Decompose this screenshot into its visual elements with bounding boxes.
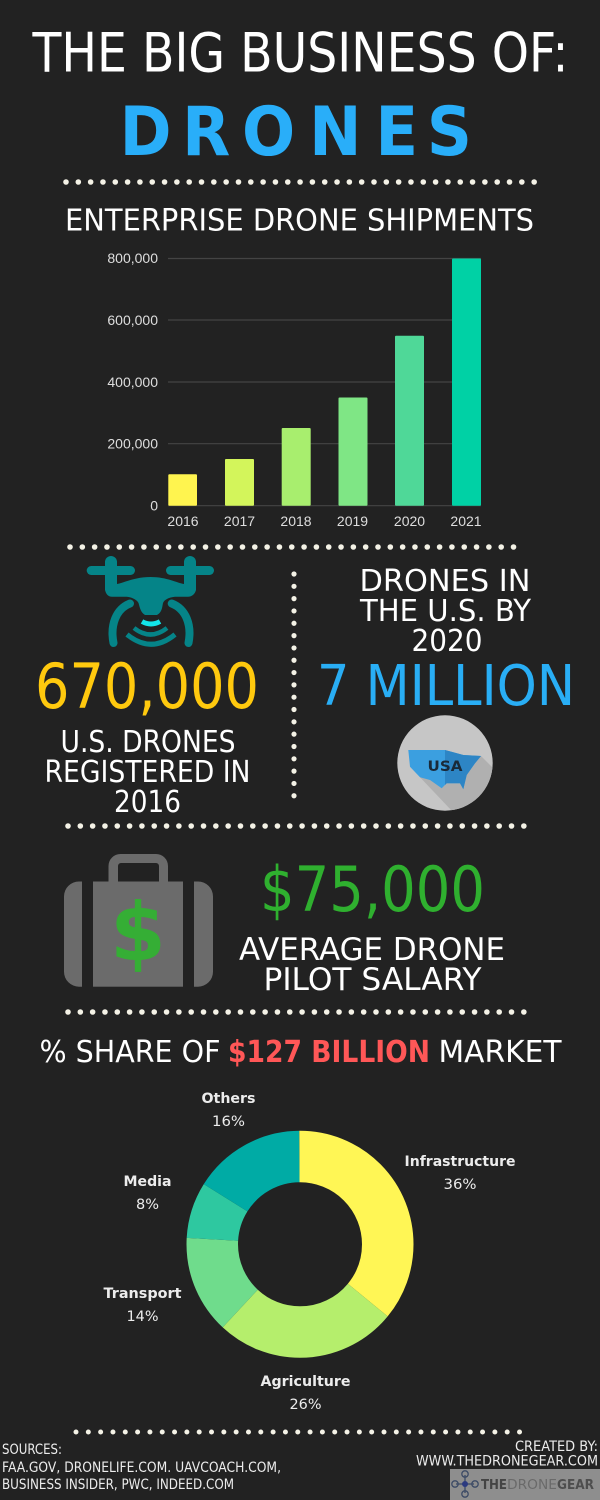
stat: 7 million: 2020	[412, 624, 482, 659]
sources: BUSINESS INSIDER, PWC, INDEED.COM	[2, 1477, 234, 1493]
stat: pilot salary	[239, 853, 505, 998]
donut labels: 36%	[444, 1177, 476, 1193]
stat: 7 million: 7 MILLION	[317, 654, 575, 719]
donut labels: Infrastructure	[404, 1154, 516, 1170]
heading: market share	[40, 1035, 562, 1070]
stat: 670,000 registered: U.S. DRONES	[60, 725, 236, 760]
donut labels: 16%	[212, 1114, 245, 1130]
sources: FAA.GOV, DRONELIFE.COM. UAVCOACH.COM,	[2, 1460, 281, 1476]
icon: briefcase with dollar sign: $	[110, 886, 166, 979]
donut labels	[104, 1091, 516, 1413]
x axis labels: 2016	[167, 513, 199, 529]
heading: market share: $127 BILLION	[228, 1035, 430, 1070]
stat: 670,000 registered: 2016	[114, 785, 181, 820]
heading: market share: % SHARE OF	[40, 1035, 220, 1070]
icon: briefcase with dollar sign	[64, 854, 213, 987]
icon: USA map badge: USA	[428, 759, 463, 775]
heading: enterprise drone shipments: ENTERPRISE DRONE SHIPMENTS	[65, 204, 534, 238]
logo: the drone gear	[450, 1469, 600, 1500]
sources: SOURCES:	[2, 1442, 62, 1458]
logo: the drone gear: DRONE	[507, 1477, 557, 1493]
sources	[2, 1442, 281, 1493]
donut labels: 14%	[126, 1309, 158, 1325]
stat: 670,000 registered	[35, 650, 259, 820]
y axis labels	[107, 250, 158, 514]
y axis labels: 200,000	[107, 436, 158, 452]
y axis labels: 800,000	[107, 250, 158, 266]
bars	[168, 258, 481, 506]
icon: USA map badge	[397, 715, 500, 811]
x axis labels: 2018	[280, 513, 312, 529]
stat: 7 million: THE U.S. BY	[359, 594, 532, 629]
donut labels: Others	[202, 1091, 256, 1107]
logo: the drone gear: THE	[481, 1477, 507, 1493]
donut labels: 26%	[290, 1397, 322, 1413]
donut chart: market share	[104, 1091, 516, 1413]
donut labels: Media	[124, 1174, 172, 1190]
donut labels: Transport	[104, 1286, 182, 1302]
y axis labels: 400,000	[107, 374, 158, 390]
stat: pilot salary: $75,000	[260, 853, 485, 926]
x axis labels: 2019	[337, 513, 368, 529]
stat: pilot salary: AVERAGE DRONE	[239, 932, 505, 968]
bar chart: shipments	[107, 250, 482, 529]
stat: 7 million: DRONES IN	[360, 564, 530, 599]
stat: pilot salary: PILOT SALARY	[264, 962, 482, 998]
x axis labels	[167, 513, 482, 529]
x axis labels: 2020	[394, 513, 425, 529]
y axis labels: 0	[150, 498, 158, 514]
stat: 7 million	[317, 564, 575, 719]
created by	[416, 1439, 598, 1470]
heading: market share: MARKET	[438, 1035, 562, 1070]
x axis labels: 2017	[224, 513, 255, 529]
title: DRONES	[120, 93, 472, 172]
donut labels: 8%	[136, 1197, 159, 1213]
x axis labels: 2021	[450, 513, 482, 529]
logo: the drone gear: GEAR	[557, 1477, 595, 1493]
icon: drone	[87, 556, 214, 644]
stat: 670,000 registered: REGISTERED IN	[44, 755, 250, 790]
stat: 670,000 registered: 670,000	[35, 650, 259, 723]
donut labels: Agriculture	[260, 1374, 351, 1390]
y axis labels: 600,000	[107, 312, 158, 328]
title	[32, 22, 569, 172]
